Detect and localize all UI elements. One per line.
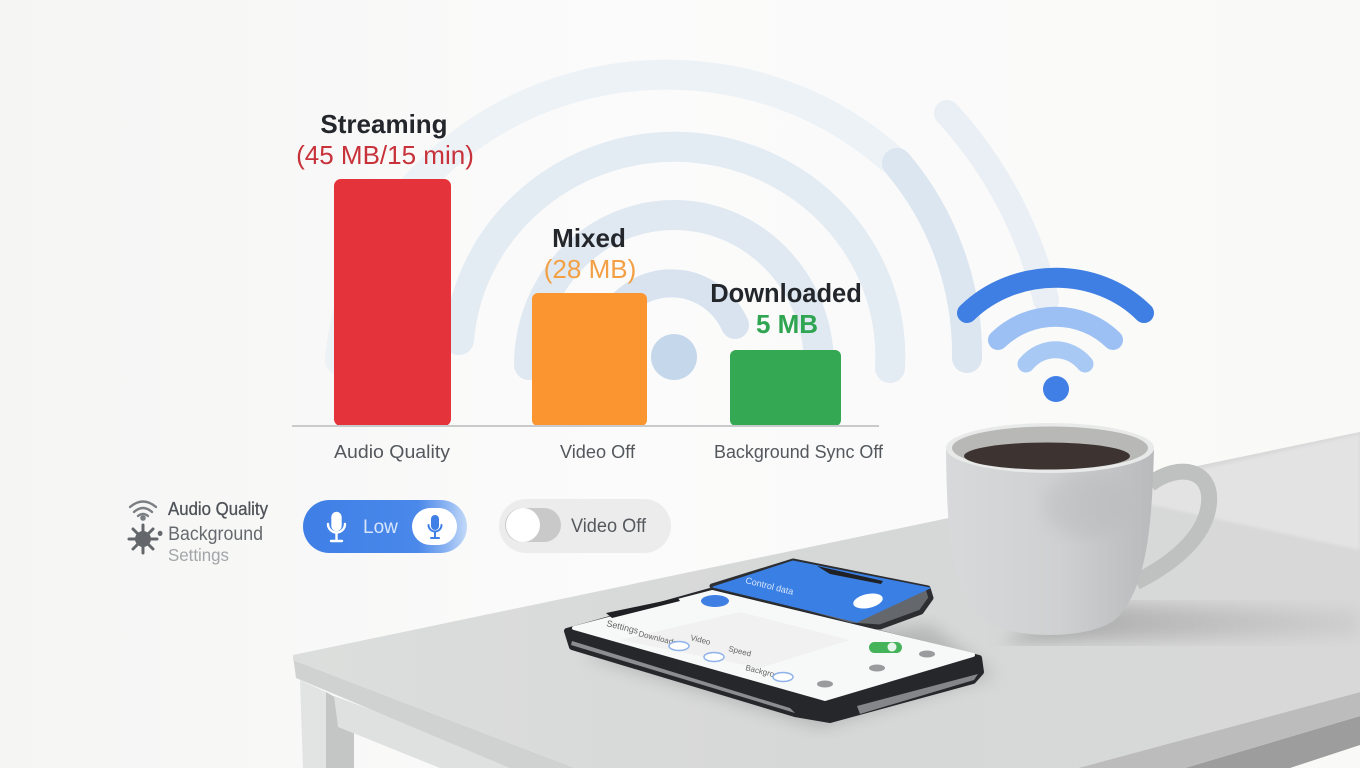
bar: streaming: (45 MB/15 min) xyxy=(296,140,474,170)
table leg xyxy=(300,680,326,768)
phone screen xyxy=(574,592,973,699)
screen panel xyxy=(620,612,850,668)
phones xyxy=(567,561,995,728)
bar: downloaded: Downloaded xyxy=(710,280,862,308)
icon: gear burst xyxy=(129,525,157,553)
bar: mixed: Mixed xyxy=(552,223,626,253)
bar: downloaded: 5 MB xyxy=(756,309,818,339)
cup handle xyxy=(1136,472,1209,582)
table right under edge xyxy=(1185,716,1360,768)
back phone: Control data xyxy=(745,575,795,597)
background wifi arcs xyxy=(340,75,1046,380)
front phone: Downloads xyxy=(638,629,678,648)
cup rim xyxy=(946,423,1154,473)
cup shadow xyxy=(1000,604,1360,642)
phone side metal xyxy=(571,641,795,713)
front phone: Background xyxy=(745,663,788,682)
bar: streaming: Streaming xyxy=(320,109,448,139)
legend text: Audio Quality xyxy=(168,499,268,519)
front phone: Video xyxy=(690,633,712,647)
coffee xyxy=(964,442,1130,470)
axis labels: Audio Quality xyxy=(334,441,451,462)
cup reflection xyxy=(1043,473,1127,537)
cup body xyxy=(946,450,1154,635)
toggle: low audio xyxy=(303,500,467,553)
phones shadow xyxy=(580,625,995,728)
axis xyxy=(292,425,879,427)
axis labels: Video Off xyxy=(560,441,636,462)
table top xyxy=(293,432,1360,768)
table front edge xyxy=(293,655,575,768)
icon: large wifi xyxy=(967,278,1144,402)
bar: streaming xyxy=(296,109,474,426)
table back light xyxy=(1143,434,1360,550)
bar: downloaded xyxy=(710,280,862,426)
front phone: Settings xyxy=(606,618,640,636)
bar: mixed xyxy=(532,223,647,426)
axis labels: Background Sync Off xyxy=(714,441,884,462)
settings legend: • Background xyxy=(157,524,263,545)
table xyxy=(293,432,1360,768)
toggle: video off xyxy=(499,499,671,553)
back phone xyxy=(712,561,931,627)
front phone xyxy=(567,591,981,720)
axis labels xyxy=(334,441,884,462)
toggle knob xyxy=(412,508,457,545)
settings legend: Settings xyxy=(168,545,229,565)
bar chart xyxy=(292,109,884,462)
settings legend xyxy=(129,499,268,565)
icon: microphone xyxy=(328,513,345,541)
toggle: video off: Video Off xyxy=(571,516,647,537)
table apron xyxy=(334,696,530,768)
coffee cup xyxy=(946,423,1360,642)
toggle: low audio: Low xyxy=(363,517,398,538)
icon: small wifi xyxy=(130,502,156,520)
bar: mixed: (28 MB) xyxy=(544,254,636,284)
front phone: Speed xyxy=(728,644,752,659)
